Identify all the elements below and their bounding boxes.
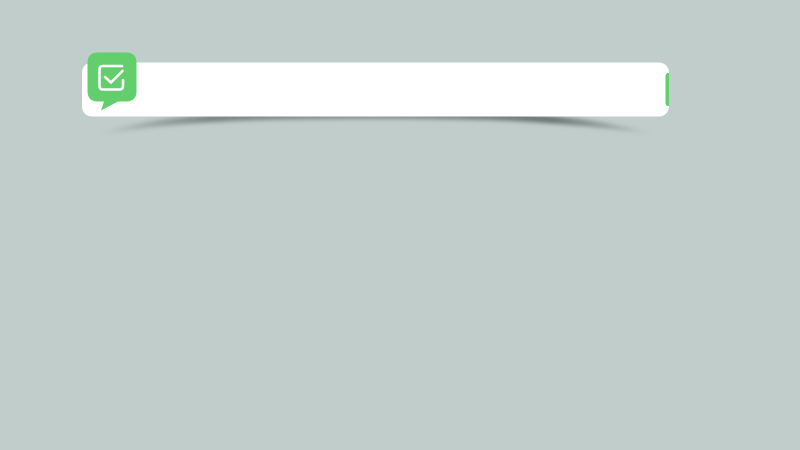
speech bubble <box>88 52 136 110</box>
check mark <box>105 71 122 82</box>
checkbox outline <box>100 66 123 90</box>
right green accent tab <box>666 73 669 106</box>
white bar panel <box>82 62 669 116</box>
icon: green speech bubble with checkbox <box>88 52 136 110</box>
card shadow <box>100 113 652 134</box>
